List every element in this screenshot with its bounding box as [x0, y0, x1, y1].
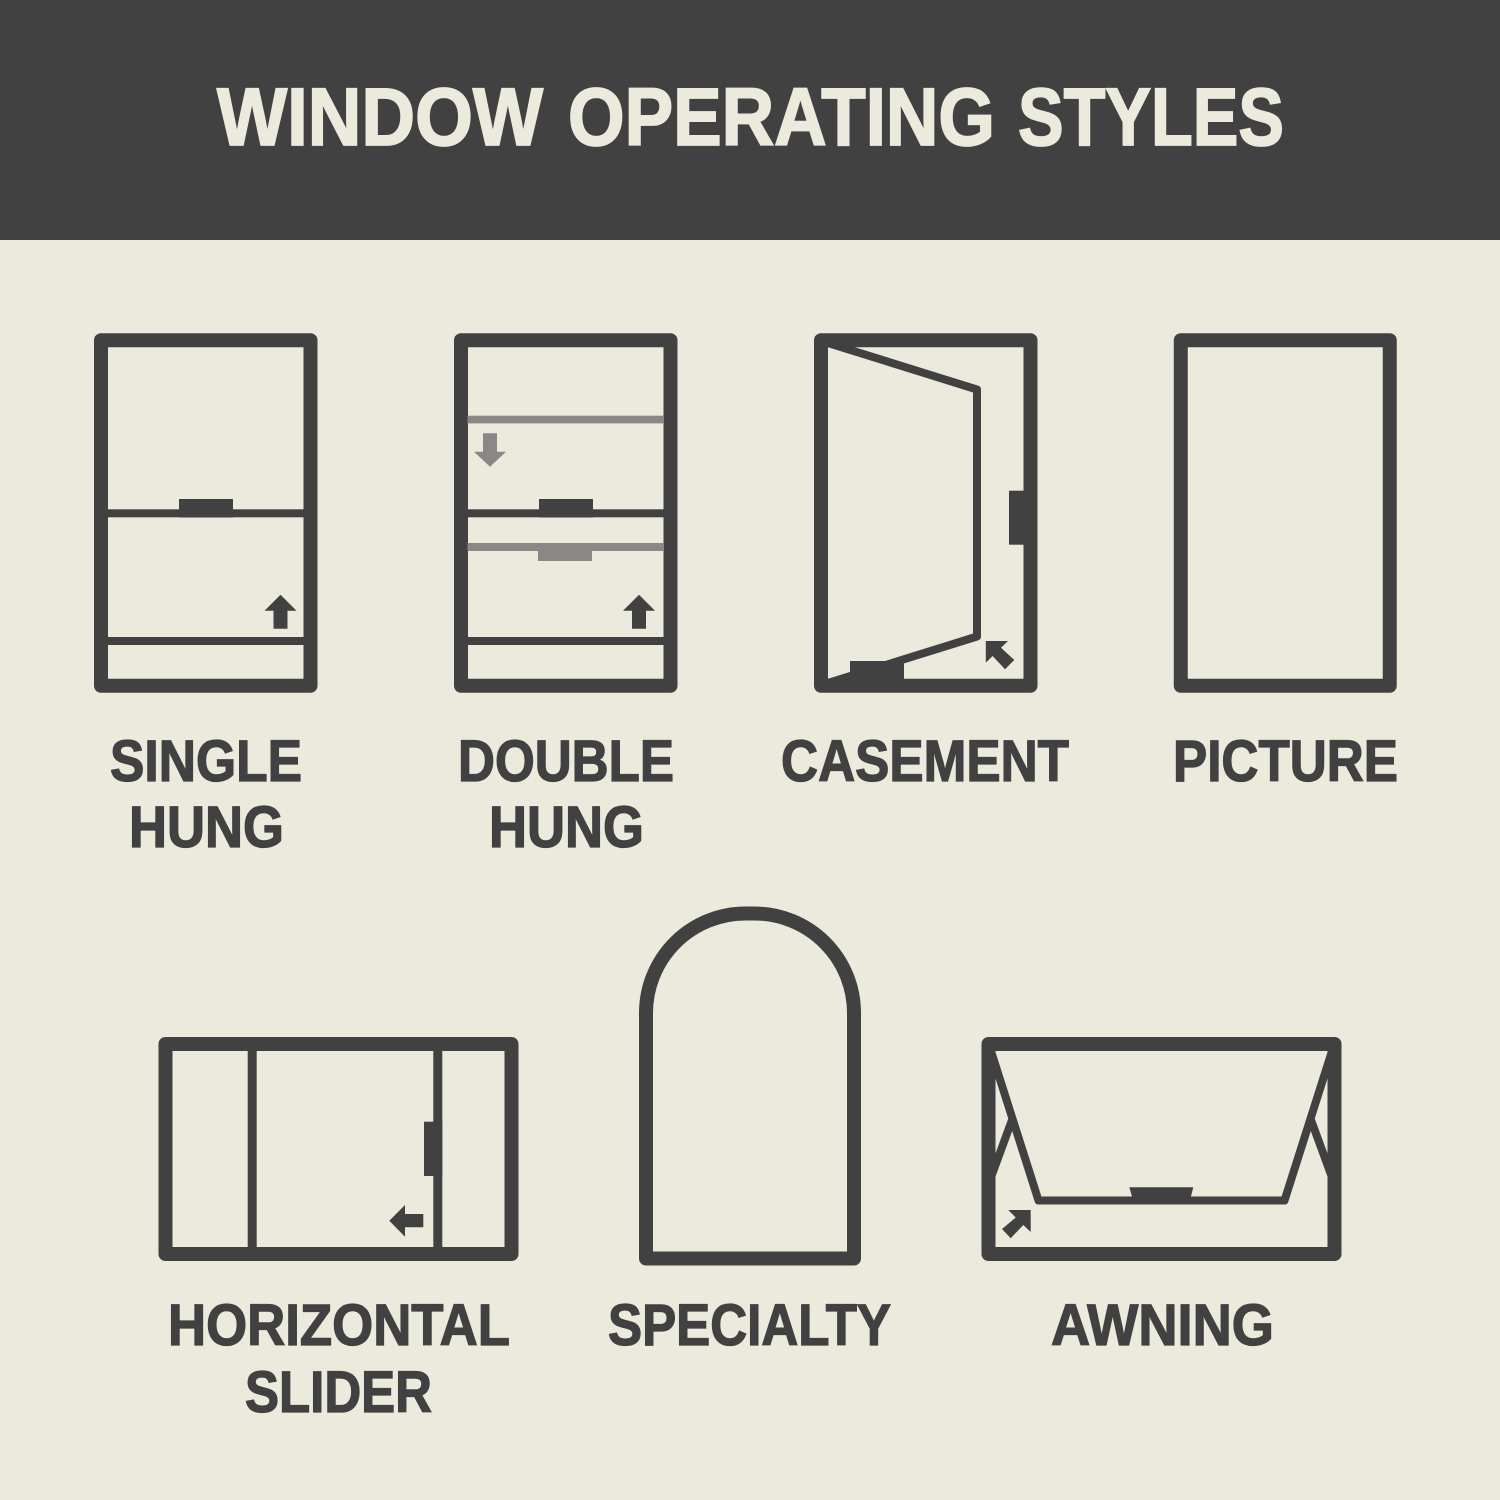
title: WINDOW	[217, 72, 544, 163]
icon: double hung window	[461, 340, 670, 686]
label: horizontal slider: SLIDER	[245, 1360, 432, 1425]
label: double hung: DOUBLE	[458, 729, 674, 794]
title: STYLES	[1018, 72, 1284, 163]
panel: picture	[1173, 340, 1398, 794]
label: single hung: HUNG	[129, 795, 284, 860]
panel: single hung	[101, 340, 318, 860]
icon: awning window	[988, 1044, 1334, 1254]
panel: specialty	[608, 914, 891, 1358]
icon: horizontal slider window	[166, 1044, 512, 1254]
label: casement: CASEMENT	[781, 729, 1069, 794]
panel: casement	[781, 340, 1069, 794]
panel: horizontal slider	[166, 1044, 525, 1425]
icon: casement window	[821, 340, 1030, 686]
panel: double hung	[458, 340, 690, 860]
label: awning: AWNING	[1051, 1293, 1274, 1358]
label: single hung: SINGLE	[110, 729, 302, 794]
label: double hung: HUNG	[489, 795, 644, 860]
label: specialty: SPECIALTY	[608, 1293, 891, 1358]
panel: awning	[988, 1044, 1334, 1358]
label: picture: PICTURE	[1173, 729, 1398, 794]
header banner	[0, 0, 1500, 240]
title: OPERATING	[568, 72, 995, 163]
label: horizontal slider: HORIZONTAL	[168, 1293, 509, 1358]
icon: single hung window	[101, 340, 310, 686]
icon: specialty arched window	[646, 914, 854, 1258]
icon: picture window	[1181, 340, 1390, 686]
